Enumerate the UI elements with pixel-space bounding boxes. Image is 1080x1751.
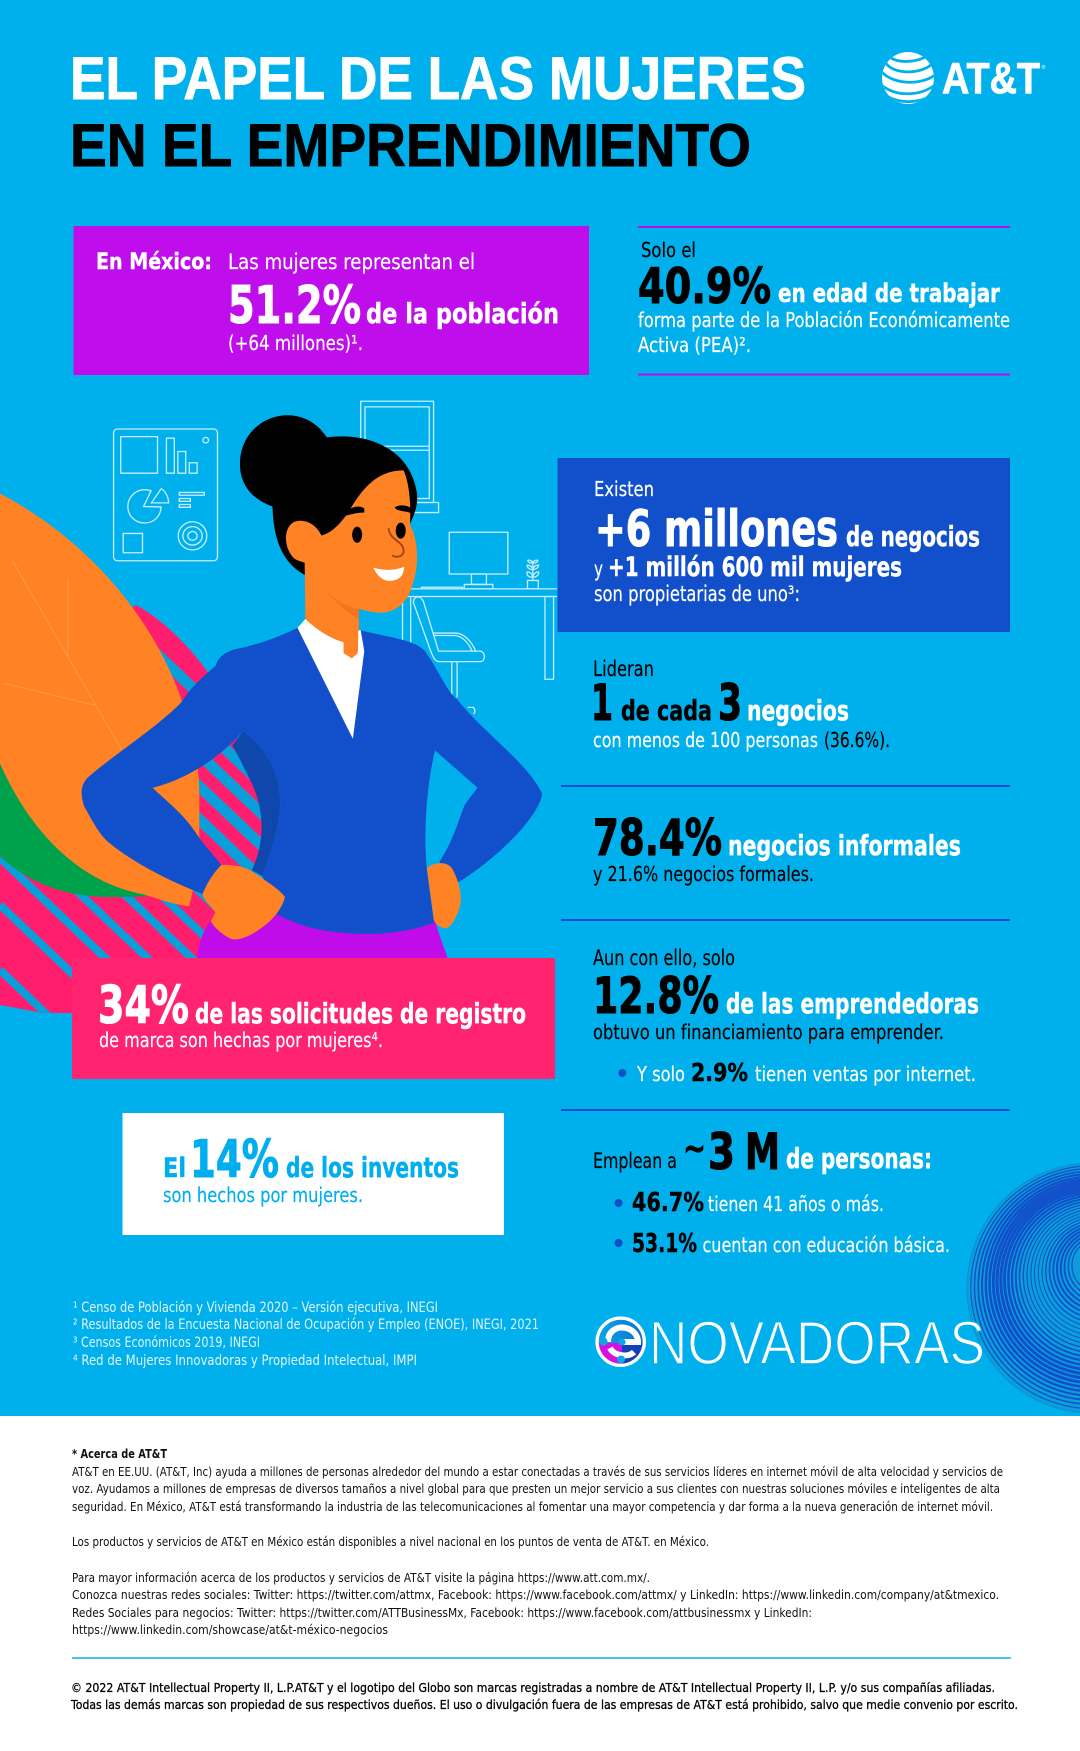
panel: En México: de la población <box>366 297 559 330</box>
stat: 1 de cada 3: de cada <box>621 694 712 727</box>
illustration: orange leaf <box>0 494 214 906</box>
stat: 1 de cada 3: 3 <box>718 674 742 732</box>
skirt <box>196 912 449 961</box>
stat: emplean a 3 millones: 53.1% <box>632 1229 697 1259</box>
sweater torso <box>243 628 542 934</box>
panel: 14% de los inventos: son hechos por mujeres. <box>163 1183 363 1207</box>
panel: población económicamente activa <box>638 226 1010 376</box>
panel: población económicamente activa: Activa (PEA)². <box>638 333 751 357</box>
panel: 14% de los inventos: El <box>163 1153 186 1184</box>
stat: emplean a 3 millones: 46.7% <box>632 1188 704 1218</box>
stat: 78.4% negocios informales: negocios informales <box>728 829 961 862</box>
panel: En México <box>74 226 589 375</box>
text block: acerca de AT&T <box>72 1446 1003 1637</box>
neck shadow <box>325 590 359 620</box>
smile <box>373 567 404 581</box>
stat: emplean a 3 millones <box>593 1123 950 1259</box>
footnotes: ⁴ Red de Mujeres Innovadoras y Propiedad Intelectual, IMPI <box>73 1353 417 1369</box>
footnotes: ¹ Censo de Población y Vivienda 2020 – Versión ejecutiva, INEGI <box>73 1300 438 1316</box>
panel: 34% solicitudes de registro <box>72 958 555 1079</box>
illustration: green leaf <box>0 752 200 897</box>
decorative spiral <box>967 1163 1080 1413</box>
stat: 1 de cada 3: 1 <box>591 674 613 732</box>
sleeve shadow <box>232 732 280 876</box>
stat: emplean a 3 millones: Emplean a <box>593 1149 677 1173</box>
panel: 14% de los inventos <box>122 1113 504 1235</box>
hair <box>240 415 417 575</box>
panel: 14% de los inventos: de los inventos <box>286 1151 459 1184</box>
panel: En México: (+64 millones)¹. <box>228 331 363 355</box>
title: EL PAPEL DE LAS MUJERES <box>70 45 806 112</box>
divider <box>561 1109 1010 1111</box>
illustration: office line art <box>114 401 557 714</box>
panel: 34% solicitudes de registro: 34% <box>98 976 189 1036</box>
illustration: striped circle <box>0 605 262 1013</box>
stat: emplean a 3 millones: tienen 41 años o más. <box>708 1192 884 1216</box>
divider <box>561 919 1010 921</box>
icon: window <box>361 401 439 513</box>
stat: emplean a 3 millones: M <box>745 1123 780 1181</box>
eyebrows <box>343 505 411 517</box>
icon: AT&T logo: AT&T <box>942 54 1040 103</box>
panel: población económicamente activa: en edad de trabajar <box>778 279 1000 309</box>
panel: +6 millones de negocios: +1 millón 600 mil mujeres <box>608 552 902 583</box>
illustration: businesswoman <box>82 415 542 961</box>
stat: 78.4% negocios informales: y 21.6% negocios formales. <box>593 862 814 886</box>
title: EN EL EMPRENDIMIENTO <box>70 112 751 179</box>
stat: 78.4% negocios informales <box>593 809 961 886</box>
stat: emplean a 3 millones: 3 <box>708 1123 735 1181</box>
right hand <box>427 863 461 928</box>
panel: +6 millones de negocios: Existen <box>594 477 654 501</box>
icon: AT&T logo: ® <box>1041 64 1046 71</box>
stat: 12.8% de las emprendedoras: de las emprendedoras <box>726 987 979 1020</box>
stat: emplean a 3 millones: ~ <box>683 1126 706 1170</box>
title <box>70 45 806 179</box>
panel: +6 millones de negocios: de negocios <box>846 520 980 553</box>
icon: eNovadoras logo: NOVADORAS <box>649 1309 985 1377</box>
stat: 1 de cada 3: (36.6%). <box>824 728 890 752</box>
panel: población económicamente activa: Solo el <box>641 238 696 262</box>
stat: 12.8% de las emprendedoras: obtuvo un financiamiento para emprender. <box>593 1020 944 1044</box>
icon: AT&T logo <box>880 52 1046 106</box>
stat: 1 de cada 3: Lideran <box>593 657 654 681</box>
footnotes <box>73 1300 539 1369</box>
panel: +6 millones de negocios <box>558 458 1010 632</box>
panel: 14% de los inventos: 14% <box>190 1130 279 1190</box>
panel: En México: Las mujeres representan el <box>228 250 475 274</box>
icon: eNovadoras logo <box>595 1316 983 1367</box>
stat: emplean a 3 millones: de personas: <box>786 1142 932 1175</box>
text block: acerca de AT&T: https://www.linkedin.com/showcase/at&t-méxico-negocios <box>72 1622 388 1637</box>
text block: acerca de AT&T: * Acerca de AT&T <box>72 1446 167 1461</box>
stat: 12.8% de las emprendedoras <box>593 946 979 1087</box>
stat: 1 de cada 3 <box>591 657 890 752</box>
icon: desk with monitor <box>402 532 557 714</box>
panel: En México: En México: <box>96 250 212 275</box>
divider <box>561 785 1010 787</box>
nose <box>389 528 404 557</box>
panel: +6 millones de negocios: +6 millones <box>595 500 838 558</box>
footer panel <box>0 1416 1080 1751</box>
stat: 1 de cada 3: negocios <box>747 694 849 727</box>
stat: emplean a 3 millones: cuentan con educación básica. <box>702 1233 950 1257</box>
footnotes: ³ Censos Económicos 2019, INEGI <box>73 1335 260 1351</box>
text block: acerca de AT&T: Redes Sociales para negocios: Twitter: https://twitter.com/ATTBusinessMx, Facebook: https://www.facebook.com/attbusinessmx y LinkedIn: <box>72 1605 812 1620</box>
panel: 34% solicitudes de registro: de marca son hechas por mujeres⁴. <box>99 1028 383 1052</box>
stat: 12.8% de las emprendedoras: Aun con ello, solo <box>593 946 735 970</box>
eyes <box>352 523 406 543</box>
text block: copyright <box>70 1680 1018 1712</box>
text block: acerca de AT&T: Para mayor información acerca de los productos y servicios de AT&T visite la página https://www.att.com.mx/. <box>72 1570 650 1585</box>
stat: 12.8% de las emprendedoras: tienen ventas por internet. <box>755 1062 976 1086</box>
left hand <box>202 865 285 939</box>
stat: 1 de cada 3: con menos de 100 personas <box>593 728 818 752</box>
panel: población económicamente activa: 40.9% <box>638 258 771 315</box>
text block: acerca de AT&T: Los productos y servicios de AT&T en México están disponibles a nivel nacional en los puntos de venta de AT&T. en México. <box>72 1534 709 1549</box>
stat: 12.8% de las emprendedoras: 2.9% <box>691 1058 748 1087</box>
panel: +6 millones de negocios: son propietarias de uno³: <box>594 582 800 606</box>
stat: 12.8% de las emprendedoras: 12.8% <box>593 967 719 1025</box>
stat: 12.8% de las emprendedoras: Y solo <box>636 1062 685 1086</box>
panel: En México: 51.2% <box>228 276 361 336</box>
divider <box>72 1657 1011 1659</box>
icon: dashboard board <box>114 429 217 561</box>
shirt collar <box>297 619 364 739</box>
panel: 34% solicitudes de registro: de las solicitudes de registro <box>195 997 526 1030</box>
sweater sleeve <box>82 628 357 894</box>
face and neck <box>286 470 417 658</box>
stat: 78.4% negocios informales: 78.4% <box>593 809 722 867</box>
footnotes: ² Resultados de la Encuesta Nacional de Ocupación y Empleo (ENOE), INEGI, 2021 <box>73 1317 539 1333</box>
panel: +6 millones de negocios: y <box>594 557 603 581</box>
